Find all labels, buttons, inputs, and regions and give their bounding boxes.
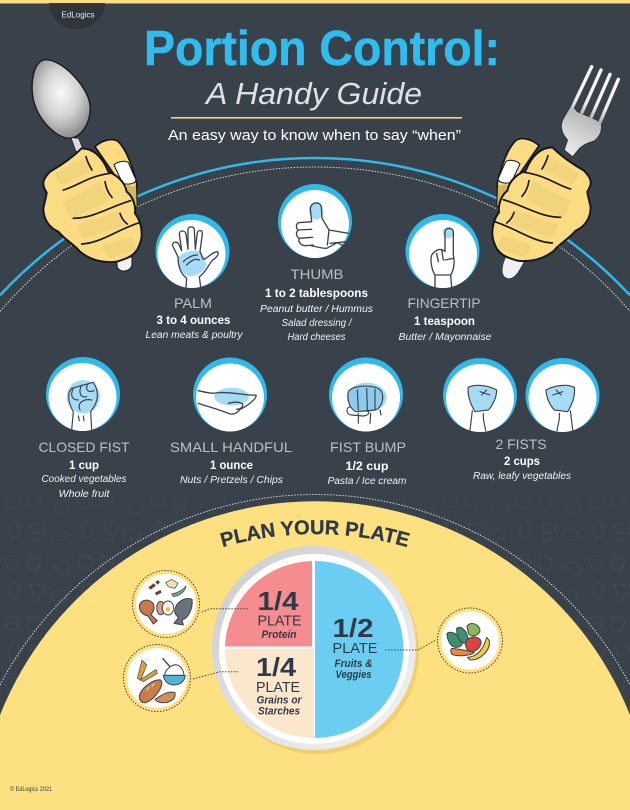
protein quarter [225,561,312,646]
guide: closed fist [38,357,130,500]
protein quarter: 1/4 [258,586,299,616]
grains quarter: 1/4 [256,652,297,682]
fork head [561,104,601,157]
guide: palm [146,214,244,341]
fruits and veggies half [315,561,404,738]
blue arc [0,158,630,295]
protein quarter: Protein [262,629,297,641]
guide: thumb: Hard cheeses [288,332,346,343]
guide: closed fist: 1 cup [69,458,99,472]
fruits and veggies half: Veggies [336,669,372,681]
guide: closed fist: Whole fruit [58,489,111,500]
grains quarter: Grains or [256,694,302,706]
spoon handle end [117,257,132,271]
icon: fingertip [406,214,480,288]
icon: right fist [526,358,600,432]
label: FIST BUMP [330,439,406,455]
EdLogics logo [49,3,105,29]
guide: fist bump [328,358,406,487]
copyright: © EdLogics 2021 [10,786,53,793]
guide: small handful: 1 ounce [210,458,253,472]
connector lines [193,609,436,679]
fruits and veggies half: 1/2 [332,613,374,643]
label: PALM [174,295,212,311]
guide: small handful: Nuts / Pretzels / Chips [180,475,283,486]
icon: thumb [278,184,352,258]
dotted arc [0,167,630,311]
grains quarter: Starches [258,706,300,718]
spoon and left fist [32,60,142,271]
grains quarter [225,649,314,738]
fork tines [573,67,618,122]
fork handle end [502,255,524,279]
icon: fruits and vegetables [438,608,502,673]
fork [502,67,618,279]
guide: thumb [260,184,373,343]
food doodle pattern [4,522,630,712]
label: CLOSED FIST [38,439,130,455]
icon: protein foods [132,570,200,638]
guide: fingertip: Butter / Mayonnaise [398,332,492,343]
guide: small handful [170,358,292,486]
guide: fingertip [398,214,492,343]
guide: fist bump: Pasta / Ice cream [328,476,406,487]
label: THUMB [290,266,344,282]
icon: left fist [443,358,517,432]
icon: grains and starches [124,644,190,712]
guide: thumb: 1 to 2 tablespoons [265,286,368,300]
icon: palm [156,214,230,288]
EdLogics logo: EdLogics [62,10,94,20]
guide: palm: Lean meats & poultry [146,330,244,341]
icon: small handful [193,358,267,432]
top yellow bar [0,0,630,4]
title rule [171,117,462,119]
title: Portion Control: [144,22,500,76]
tagline: An easy way to know when to say “when” [168,128,461,144]
icon: closed fist [46,357,120,431]
left fist [43,140,142,262]
grains quarter: PLATE [256,680,300,696]
guide: 2 fists: 2 cups [504,454,540,468]
plan your plate heading: PLAN YOUR PLATE [220,520,410,548]
subtitle: a handy guide: A Handy Guide [204,76,422,111]
spoon neck [71,138,83,152]
fruits and veggies half: PLATE [332,641,378,657]
label: 2 FISTS [496,436,546,452]
right fist [492,139,591,261]
guide: thumb: Peanut butter / Hummus [260,304,373,315]
spoon bowl [32,60,90,138]
icon: fist bump [329,358,403,432]
label: SMALL HANDFUL [170,439,292,455]
fruits and veggies half: Fruits & [334,658,373,670]
yellow plate section [0,495,630,810]
plate [212,546,419,754]
guide: thumb: Salad dressing / [282,318,353,329]
guide: fingertip: 1 teaspoon [414,314,475,328]
guide: fist bump: 1/2 cup [346,459,388,473]
label: FINGERTIP [408,295,480,311]
guide: 2 fists [443,358,600,482]
guide: closed fist: Cooked vegetables [42,474,126,485]
title [144,22,500,111]
guide: palm: 3 to 4 ounces [156,313,231,327]
guide: 2 fists: Raw, leafy vegetables [473,471,571,482]
protein quarter: PLATE [258,614,302,630]
